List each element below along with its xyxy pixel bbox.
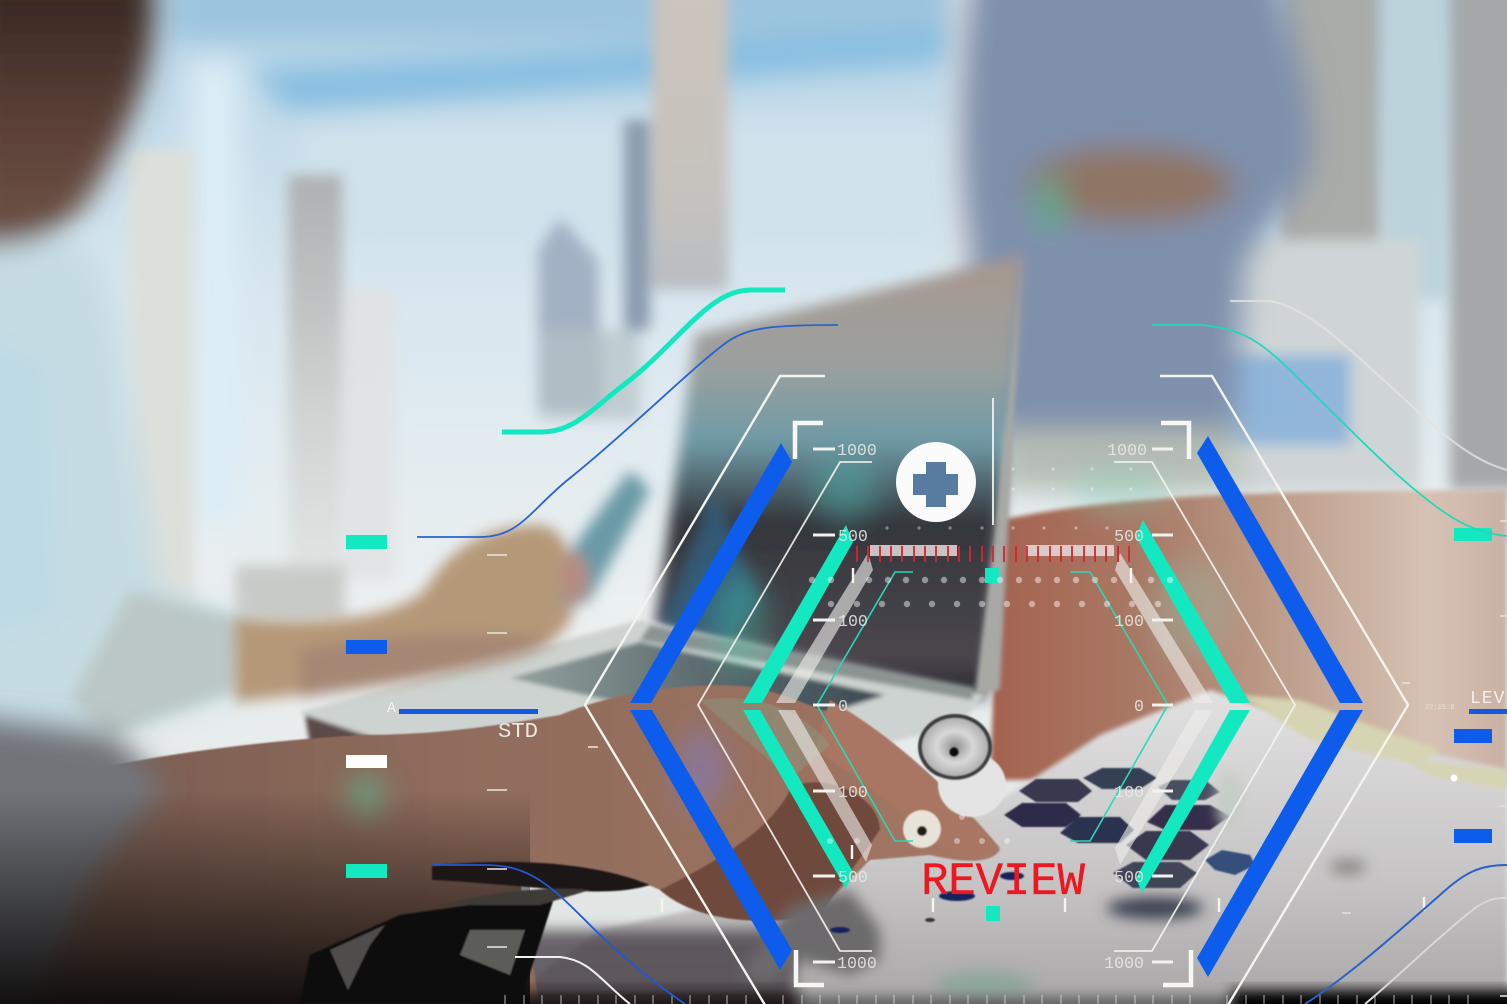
right scale ticks and labels: 1000: [1104, 954, 1144, 973]
right scale ticks and labels: 0: [1134, 697, 1144, 716]
left scale ticks and labels: 1000: [837, 441, 877, 460]
stethoscope chest piece and earpiece: [903, 714, 1006, 848]
right scale ticks and labels: 1000: [1107, 441, 1147, 460]
STD gauge label: [387, 700, 538, 744]
left status bars: [346, 535, 387, 878]
bottom ruler ticks: [505, 995, 1468, 1004]
REVIEW label: REVIEW: [921, 856, 1085, 908]
sky and window frames: [170, 0, 1005, 520]
centre vertical line: [992, 398, 994, 525]
LEVEL gauge label: 22:19:8: [1425, 704, 1454, 712]
right scale ticks and labels: 500: [1114, 868, 1144, 887]
upper arm with phone: [235, 470, 650, 702]
right scale ticks and labels: [1104, 441, 1173, 973]
right scale ticks and labels: 100: [1114, 783, 1144, 802]
hexagon icon sheet: [1004, 768, 1255, 888]
left scale ticks and labels: 500: [838, 527, 868, 546]
thin teal inner hexagon lines: [817, 572, 1168, 841]
right status bars: [1450, 528, 1492, 843]
teal chevrons: [743, 520, 1250, 893]
corner brackets: [795, 423, 1191, 985]
teal lens glows: [348, 458, 1230, 814]
glasses on the desk: [300, 862, 650, 1004]
red ruler with grey bars: [857, 545, 1129, 562]
small navy ink marks: [830, 872, 1024, 933]
left scale ticks and labels: 100: [838, 783, 868, 802]
person at left: head and shirt: [0, 0, 250, 770]
blurred city towers: [130, 0, 728, 620]
table: [990, 490, 1507, 780]
forearm and typing hand: [0, 685, 1000, 1004]
small side dashes: [487, 521, 1507, 996]
teal marker squares: [985, 568, 1000, 921]
laptop screen: [655, 255, 1022, 700]
STD gauge label: STD: [498, 721, 538, 744]
laptop base and keyboard: [300, 620, 985, 790]
left scale ticks and labels: [813, 441, 877, 973]
lower shirt sleeve: [0, 715, 165, 1004]
icon: medical cross in circle: [896, 442, 976, 522]
paper with icons: [500, 690, 1507, 1004]
bottom vignettes: [480, 990, 1507, 1004]
connector curves: [417, 290, 1507, 1004]
HUD overlay: outer and inner white hexagon frame: [585, 376, 1408, 1004]
blurred sheet marks: [740, 770, 1366, 999]
dotted grid rows: [809, 467, 1173, 844]
blue chevrons: [630, 436, 1363, 977]
right scale ticks and labels: 500: [1114, 527, 1144, 546]
left scale ticks and labels: 0: [838, 697, 848, 716]
man standing: [961, 0, 1312, 490]
right scale ticks and labels: 100: [1114, 612, 1144, 631]
desk shadow below hand: [490, 930, 800, 1004]
right columns: [1200, 0, 1507, 490]
STD gauge label: A: [387, 700, 396, 717]
translucent inner chevrons: [776, 553, 1213, 865]
LEVEL gauge label: [1425, 689, 1507, 714]
small white vertical ticks: [662, 568, 1424, 912]
left scale ticks and labels: 1000: [837, 954, 877, 973]
left scale ticks and labels: 500: [838, 868, 868, 887]
left scale ticks and labels: 100: [838, 612, 868, 631]
